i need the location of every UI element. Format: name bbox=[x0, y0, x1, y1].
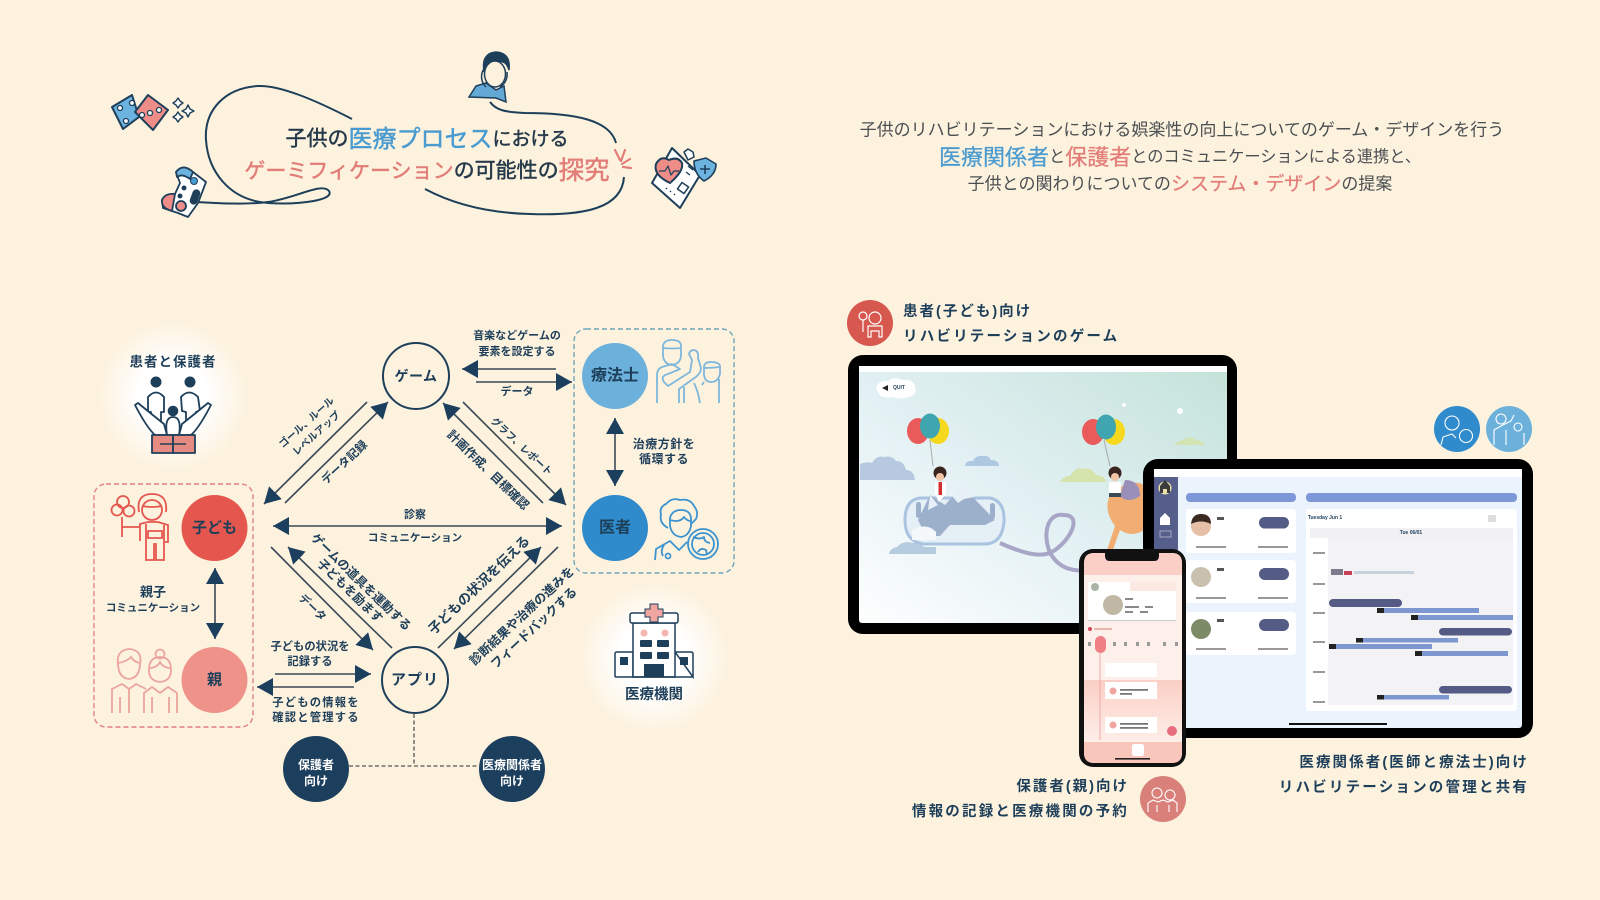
arrows: app doctor bbox=[438, 547, 558, 649]
device group bbox=[847, 300, 1533, 822]
label: game tools: ゲームの道具を運動する bbox=[308, 530, 415, 633]
heading: management bbox=[1279, 754, 1529, 796]
node: child: 子ども bbox=[192, 520, 237, 536]
schedule bbox=[1306, 493, 1517, 711]
icons: medical staff circles bbox=[1434, 406, 1532, 452]
node: game: ゲーム bbox=[394, 368, 438, 384]
node: for medical staff: 医療関係者 bbox=[482, 757, 542, 772]
label: sound settings: 音楽などゲームの bbox=[473, 328, 561, 342]
patients list bbox=[1186, 493, 1296, 655]
heading: guardians: 情報の記録と医療機関の予約 bbox=[912, 802, 1129, 820]
mountain island bbox=[905, 486, 1004, 544]
node: doctor: 医者 bbox=[599, 518, 631, 536]
track bbox=[1000, 515, 1090, 570]
label: check information: 子どもの情報を bbox=[272, 695, 360, 709]
label: record status: 子どもの状況を bbox=[270, 639, 350, 653]
label: data recording: データ記録 bbox=[319, 437, 370, 487]
heading: guardians: 保護者(親)向け bbox=[1016, 777, 1129, 795]
icon: doctor bbox=[655, 499, 718, 560]
node: for guardians: 保護者 bbox=[298, 757, 334, 772]
phone profile card bbox=[1088, 582, 1176, 621]
icon: dice bbox=[112, 95, 194, 130]
label: parent-child communication: コミュニケーション bbox=[106, 602, 200, 614]
balloons left bbox=[907, 414, 949, 466]
phone bbox=[1079, 549, 1186, 767]
emphasis rays bbox=[615, 150, 631, 168]
icon: child circle bbox=[847, 300, 893, 346]
clouds bbox=[860, 438, 1206, 554]
label: tell status: 子どもの状況を伝える bbox=[425, 532, 533, 637]
label: planning: 計画作成、目標確認 bbox=[444, 427, 532, 513]
description bbox=[860, 120, 1504, 194]
label: sound settings bbox=[473, 328, 561, 358]
node: therapist: 療法士 bbox=[591, 366, 639, 384]
label: data: データ bbox=[296, 591, 329, 624]
arrows: game therapist bbox=[462, 369, 572, 382]
arrow: consultation bbox=[273, 525, 562, 527]
node: parent bbox=[182, 647, 248, 713]
icon: person with stethoscope bbox=[469, 52, 509, 102]
label: 患者と保護者 bbox=[130, 354, 216, 370]
node: app: アプリ bbox=[391, 672, 439, 688]
arrow: child parent bbox=[214, 568, 216, 639]
node: for medical staff bbox=[479, 736, 545, 802]
icon: hospital bbox=[615, 604, 693, 677]
quit button: QUIT bbox=[893, 385, 905, 391]
panel: medical staff bbox=[574, 329, 734, 573]
description line 3: 子供との関わりについてのシステム・デザインの提案 bbox=[968, 172, 1392, 194]
arrows: game child bbox=[264, 402, 388, 504]
orange island bbox=[1105, 480, 1150, 558]
dashed connector bbox=[349, 714, 479, 766]
title block bbox=[112, 52, 716, 217]
icon: therapist bbox=[657, 340, 720, 403]
heading: guardians bbox=[912, 777, 1129, 820]
boy right bbox=[1108, 466, 1122, 497]
heading: child game bbox=[903, 302, 1119, 345]
heading: management: 医療関係者(医師と療法士)向け bbox=[1299, 754, 1529, 771]
node: for guardians bbox=[283, 736, 349, 802]
title line 1: 子供の医療プロセスにおける bbox=[285, 126, 569, 152]
label: sound settings: 要素を設定する bbox=[478, 344, 556, 358]
node: game bbox=[383, 343, 449, 409]
icon: parents circle bbox=[1140, 776, 1186, 822]
label: goal rules: ゴール、ルール bbox=[276, 394, 337, 451]
node: app bbox=[382, 647, 448, 713]
title curves bbox=[197, 86, 624, 214]
label: check information: 確認と管理する bbox=[272, 710, 360, 724]
description line 1: 子供のリハビリテーションにおける娯楽性の向上についてのゲーム・デザインを行う bbox=[860, 120, 1504, 140]
icon: parents bbox=[112, 649, 177, 713]
phone calendar bbox=[1088, 627, 1178, 653]
panel: patient and guardian bbox=[98, 321, 248, 471]
icon: child bbox=[112, 494, 168, 560]
node: for medical staff: 向け bbox=[500, 773, 524, 788]
label: treatment policy: 循環する bbox=[639, 451, 689, 466]
label: 医療機関 bbox=[625, 686, 683, 703]
diagram bbox=[94, 321, 734, 802]
label: goal rules: レベルアップ bbox=[290, 409, 343, 458]
tablet: game bbox=[848, 355, 1237, 634]
label: data: データ bbox=[500, 384, 534, 398]
schedule: Tue 06/01 bbox=[1400, 530, 1422, 536]
sidebar bbox=[1154, 477, 1178, 728]
label: graph report: グラフ、レポート bbox=[488, 414, 555, 478]
arrows: app parent bbox=[257, 674, 371, 687]
label: record status bbox=[270, 639, 350, 668]
balloons right bbox=[1082, 414, 1125, 466]
label: treatment policy bbox=[633, 436, 695, 466]
arrows: game doctor bbox=[443, 402, 566, 505]
phone timeline bbox=[1084, 653, 1182, 742]
stars bbox=[1122, 403, 1183, 414]
schedule: Tuesday Jun 1 bbox=[1308, 515, 1342, 521]
label: consultation: 診察 bbox=[404, 507, 426, 521]
label: parent-child communication: 親子 bbox=[140, 584, 166, 600]
label: feedback: フィードバックする bbox=[488, 585, 580, 671]
icon: family in hands bbox=[135, 377, 211, 453]
description line 2: 医療関係者と保護者とのコミュニケーションによる連携と、 bbox=[939, 144, 1421, 170]
panel: parent and child bbox=[94, 484, 253, 727]
node: therapist bbox=[582, 343, 648, 409]
label: game tools: 子どもを励ます bbox=[314, 556, 386, 626]
node: doctor bbox=[582, 495, 648, 561]
arrows: app child bbox=[271, 547, 392, 650]
heading: management: リハビリテーションの管理と共有 bbox=[1279, 778, 1529, 796]
label: record status: 記録する bbox=[287, 654, 333, 668]
node: child bbox=[182, 495, 248, 561]
icon: medical chart bbox=[652, 148, 716, 208]
arrow: therapist doctor bbox=[614, 418, 616, 486]
panel: medical institution bbox=[579, 583, 729, 733]
heading: child game: 患者(子ども)向け bbox=[903, 302, 1032, 320]
tablet: management bbox=[1143, 459, 1533, 738]
node: parent: 親 bbox=[207, 672, 222, 688]
label: parent-child communication bbox=[106, 584, 200, 614]
label: treatment policy: 治療方針を bbox=[633, 436, 695, 451]
label: communication: コミュニケーション bbox=[368, 532, 462, 544]
heading: child game: リハビリテーションのゲーム bbox=[903, 327, 1119, 345]
title line 2: ゲーミフィケーションの可能性の探究 bbox=[244, 157, 610, 185]
label: check information bbox=[272, 695, 360, 724]
quit button bbox=[876, 378, 916, 398]
boy left bbox=[934, 466, 946, 502]
node: for guardians: 向け bbox=[304, 773, 328, 788]
icon: game controller bbox=[162, 168, 206, 217]
label: feedback: 診断結果や治療の進みを bbox=[466, 563, 577, 668]
phone tab bar bbox=[1084, 742, 1182, 763]
